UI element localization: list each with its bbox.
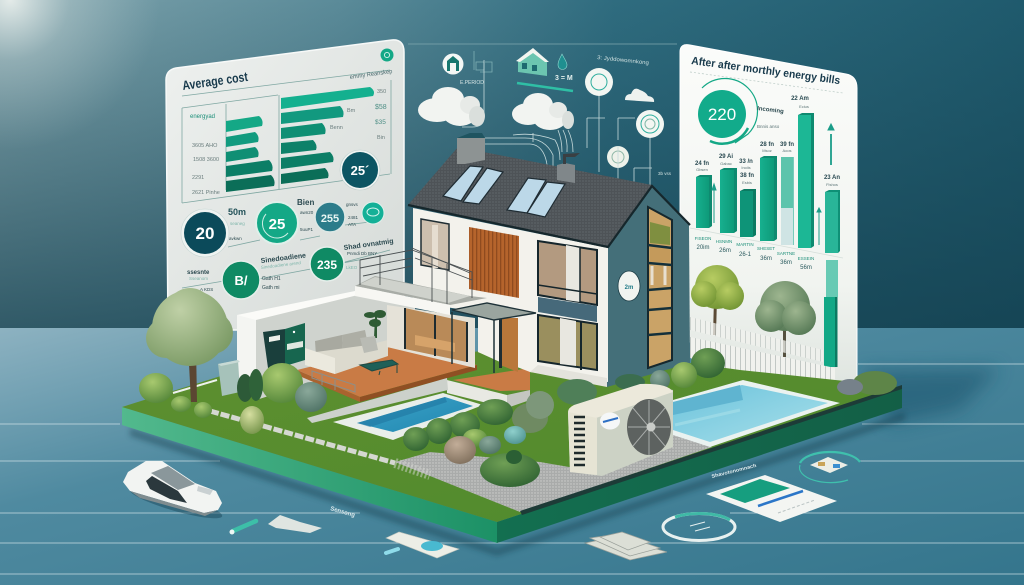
- sofa: [305, 330, 388, 374]
- back wall: [237, 291, 415, 400]
- label: sensong: Sensong: [329, 506, 356, 519]
- icon: panel badge: [380, 48, 394, 62]
- platform base: [122, 345, 902, 543]
- icon: right cloud: [512, 93, 574, 130]
- shrubs: left garden: [139, 363, 327, 434]
- balcony slab: [355, 276, 487, 305]
- shadow right of platform: [860, 368, 1000, 425]
- icon: pen: [230, 521, 256, 534]
- side wall badge: 2m: [625, 285, 633, 291]
- balcony railing: [360, 248, 472, 304]
- icon: house circle: [442, 54, 464, 74]
- foundation: [530, 365, 607, 387]
- bar axis labels: 36m: [760, 256, 772, 262]
- chimney right: [557, 153, 580, 183]
- icon: progress ring: [663, 513, 735, 540]
- stepping stones: [210, 411, 430, 475]
- label: monitoring: 3: Jyddowomnkong: [597, 55, 649, 66]
- shrubs: house side: [557, 348, 897, 405]
- gauge: 20: 20: [196, 224, 214, 243]
- chart row labels: Bm: [347, 108, 356, 114]
- logo: [600, 412, 620, 430]
- tall side window: [648, 207, 672, 368]
- gauge annotations: ssesnte: [187, 270, 210, 276]
- chart row labels: 1508 3600: [193, 157, 219, 163]
- title: average cost: Average cost: [181, 69, 249, 93]
- pool wall: [307, 378, 448, 423]
- left pool: [333, 393, 483, 440]
- plant: [364, 310, 386, 338]
- gauge annotations: Gath mi: [262, 285, 280, 291]
- label: document title: Shavotonomnach: [711, 463, 757, 480]
- bar sublabels: Flshos: [826, 182, 838, 187]
- floor: [0, 328, 1024, 585]
- chart row labels: $58: [375, 104, 387, 111]
- title: after monthly energy bills: After after morthly energy bills: [691, 55, 841, 87]
- gauge: B/: B/: [234, 273, 248, 288]
- gauge: 25 teal: [256, 202, 298, 244]
- bar value labels: [695, 96, 840, 181]
- gauge annotations: 5uuP1: [300, 227, 314, 232]
- chart row labels: 2291: [192, 175, 204, 181]
- bar value labels: 24 fn: [695, 161, 709, 167]
- gauge annotations: Shad ovnatmig: [343, 238, 394, 252]
- panel: after monthly energy bills: [680, 45, 857, 398]
- entry door: [478, 318, 518, 372]
- house: [355, 133, 690, 387]
- gauge annotations: LkEO: [346, 265, 358, 270]
- bar sublabels: Inoiis: [741, 165, 751, 170]
- deck: [297, 347, 530, 402]
- battery cabinets: [263, 323, 305, 368]
- progress bar: [517, 83, 573, 91]
- vents: [574, 417, 585, 465]
- bar axis labels: FISEON: [695, 236, 711, 241]
- front wall: [413, 208, 608, 382]
- bar sublabels: [696, 104, 838, 187]
- label: period: E.PERIOD: [460, 80, 484, 86]
- icon: paper: [268, 515, 322, 533]
- pavement: [395, 432, 712, 512]
- icon: small teal gauge: [362, 202, 384, 224]
- bar value labels: 29 Ai: [719, 154, 733, 160]
- gauge annotations: gnsvs: [346, 202, 359, 207]
- bar chart: right bars: [281, 87, 374, 184]
- chart row labels: energyad: [190, 114, 215, 120]
- bar value labels: 28 fn: [760, 142, 774, 148]
- gauge annotations: awn20: [300, 210, 314, 215]
- solar panels: [443, 166, 565, 217]
- gauge annotations: Sinedoadiene: [260, 252, 307, 265]
- recessed room: [387, 305, 475, 368]
- gauge annotations: A KDS: [200, 287, 213, 292]
- utility box: [218, 360, 240, 396]
- bar chart: left bars: [226, 116, 275, 192]
- wood cladding: [469, 227, 519, 298]
- label: right note: 3b vss: [658, 171, 672, 176]
- gauge annotations: avkwn: [229, 236, 242, 241]
- gauge: 25 dark: [340, 150, 380, 190]
- balcony floor deck: [360, 277, 470, 303]
- bar axis labels: 36m: [780, 260, 792, 266]
- chimney left: [457, 133, 485, 164]
- bar value labels: 22 Am: [791, 96, 809, 102]
- icon: status ring: [800, 452, 860, 483]
- background wall: [0, 0, 1024, 330]
- connector lines: [462, 60, 652, 205]
- document: [706, 475, 837, 522]
- balcony edge: [355, 286, 450, 315]
- tree: left: [146, 288, 233, 402]
- icon: money stack: [585, 532, 667, 560]
- chart row labels: Bin: [377, 135, 385, 141]
- icon: car: [123, 461, 224, 524]
- tree: right panel right: [755, 281, 816, 357]
- chart row labels: 350: [377, 89, 386, 95]
- label: incoming: Incoming: [757, 106, 784, 115]
- gauge annotations: 2481: [348, 215, 359, 220]
- gauge annotations: seaneg: [230, 221, 245, 226]
- bar sublabels: Ecius: [799, 104, 809, 109]
- low garden wall line: [173, 380, 217, 393]
- bar axis labels: 20im: [696, 245, 710, 251]
- bar axis labels: 26m: [719, 248, 731, 254]
- tree: right panel left: [691, 265, 744, 335]
- bar axis labels: 56m: [800, 265, 812, 271]
- roof: [408, 147, 652, 247]
- icon: left cloud: [418, 87, 485, 126]
- air conditioner: [568, 384, 673, 476]
- bar axis labels: SARTNE: [777, 251, 795, 256]
- gauge annotations: [187, 198, 394, 292]
- fan: [627, 399, 671, 455]
- bar sublabels: Aoos: [782, 148, 792, 153]
- gauge annotations: Sseanom: [189, 276, 208, 281]
- middle band: [538, 297, 597, 322]
- top icons group: [408, 44, 677, 205]
- gauge annotations: ATA: [348, 222, 356, 227]
- icon: gauge low: [607, 146, 629, 168]
- bar sublabels: Esbis: [742, 180, 752, 185]
- bar sublabels: Gbsen: [696, 167, 708, 172]
- fence: [690, 317, 835, 398]
- bar axis labels: HSNMN: [716, 239, 732, 244]
- gauge: 20: [181, 209, 229, 257]
- bar axis labels: 26-1: [739, 252, 752, 258]
- bar sublabels: Msoz: [762, 148, 772, 153]
- gauge: 255: 255: [321, 213, 339, 225]
- deck railing: [312, 371, 355, 392]
- subtitle: emmy Reanskep: [349, 69, 393, 81]
- chart row labels: Benn: [330, 125, 343, 131]
- icon: small house: [516, 48, 549, 76]
- bar chart: bills: [696, 113, 840, 367]
- coffee table: [360, 360, 398, 375]
- icon: pill: [386, 549, 398, 553]
- gauge: 255: [315, 202, 345, 232]
- label: 3 M: 3 = M: [555, 75, 573, 82]
- side wall: [607, 187, 690, 387]
- icon: small cloud: [625, 89, 654, 102]
- bar axis labels: ESSEIN: [798, 256, 814, 261]
- bar value labels: 33 /n: [739, 159, 753, 165]
- arrows: [712, 124, 834, 245]
- lower right window: [538, 315, 597, 370]
- bar value labels: 39 fn: [780, 142, 794, 148]
- bar value labels: 38 fn: [740, 173, 754, 179]
- edge strip: [520, 385, 902, 515]
- bar sublabels: Gabac: [720, 161, 732, 166]
- entry steps: [447, 380, 530, 408]
- icon: gauge mid: [636, 110, 664, 138]
- gauge annotations: Sinedoadiene arend: [261, 260, 302, 270]
- gauge: 235: [310, 247, 344, 281]
- gauge: 25 teal: 25: [269, 216, 285, 233]
- icon: water drop: [558, 54, 567, 70]
- platform shadow: [130, 412, 905, 556]
- icon: gauge top: [585, 68, 613, 96]
- floor guide lines: [0, 364, 1024, 574]
- bar value labels: 23 An: [824, 175, 840, 181]
- shrubs: central garden: [403, 391, 554, 487]
- canopy posts: [452, 312, 494, 373]
- chart row labels: 2621 Pinhe: [192, 190, 220, 196]
- gauge annotations: Gath H1: [262, 276, 281, 282]
- icon: banknotes with blue mark: [386, 532, 459, 558]
- chart row labels: [190, 89, 387, 196]
- icon: server glyph: [474, 51, 492, 72]
- gauge: 220: [698, 78, 758, 144]
- gauge: B/: [222, 261, 260, 299]
- bar axis labels: MARTIN: [736, 242, 754, 247]
- entry canopy: [452, 303, 536, 320]
- right pool: [673, 380, 840, 447]
- roof edge: [408, 186, 690, 247]
- chart row labels: 3605 AHO: [192, 143, 218, 149]
- upper right window: [538, 241, 597, 305]
- gauge annotations: Pnmdi Db BNY: [347, 251, 377, 256]
- upper left window: [421, 219, 449, 270]
- bar axis labels: [695, 236, 814, 271]
- gauge: 220: 220: [708, 105, 736, 124]
- chart row labels: $35: [375, 119, 386, 126]
- gauge: 25 dark: 25´: [351, 163, 369, 178]
- side wall badge: [618, 271, 640, 301]
- gauge annotations: Bien: [297, 198, 314, 207]
- bar axis labels: SHESET: [757, 246, 775, 251]
- panel: average cost: [166, 40, 404, 330]
- label: fine print: Bnnis anso: [757, 124, 780, 129]
- gauge: 235: 235: [317, 258, 337, 272]
- gauge annotations: 50m: [228, 207, 246, 217]
